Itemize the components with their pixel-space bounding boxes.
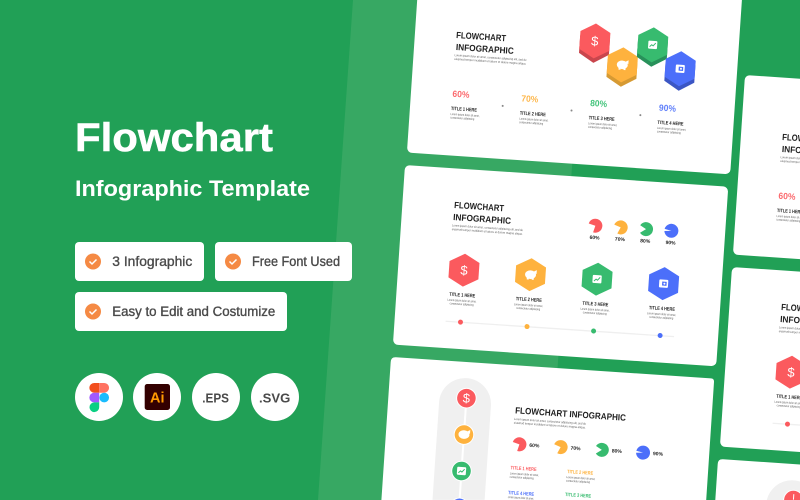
panel: slide 2 hexagon timeline [393,165,728,366]
step 3 [580,262,613,316]
subtitle: Infographic Template [75,176,310,201]
heading: INFOGRAPHIC [456,42,515,56]
pie: 80%: 80% [612,448,623,455]
item: title 4: TITLE 4 HERE [508,490,535,498]
heading: FLOWCHART [454,200,505,213]
step 2: consectetur adipiscing [516,306,541,311]
stat: 90% [657,103,688,135]
feature chip: 3 Infographic [75,242,204,281]
arrow markers [502,105,641,116]
icon: Figma [75,373,123,421]
icon: blue hexagon wallet [664,50,696,92]
icon: Adobe Illustrator [133,373,181,421]
vertical pill with icons [432,376,493,500]
pie: 90%: 90% [665,240,676,247]
heading [453,200,513,226]
pie: 70% [613,220,628,243]
stat: 90%: TITLE 4 HERE [657,120,684,128]
icon: red hexagon dollar: $ [591,33,600,49]
stat: 80%: Lorem ipsum dolor sit amet, [588,121,617,127]
heading [455,30,515,56]
pie: 90% [663,223,679,247]
icon: SVG badge [251,373,299,421]
stat: 60% [450,89,481,121]
panel: slide 1 hexagon flow [407,0,742,174]
item: title 2: consectetur adipiscing [566,479,590,484]
timeline [772,421,800,441]
stat: 70%: consectetur adipiscing [519,120,544,126]
stat: 80%: consectetur adipiscing [588,125,612,130]
step 3: consectetur adipiscing [583,310,607,316]
pie: 80% [639,222,653,245]
step 2 [513,257,547,312]
item: title 1: Lorem ipsum dolor sit amet, [510,471,539,477]
step 1: $ [460,262,469,278]
vertical pill with icon [767,479,800,500]
step 2: TITLE 2 HERE [516,296,542,304]
item: title 2 [566,469,596,484]
feature chip: Easy to Edit and Costumize [75,292,287,331]
description: eiusmod tempor incididunt ut labore et dolore magna aliqua. [514,421,586,430]
stat: 90%: consectetur adipiscing [657,129,681,135]
pie: 90% [636,445,664,461]
item: title 2: Lorem ipsum dolor sit amet, [566,475,596,481]
step 1: TITLE 1 HERE [449,292,476,300]
heading [780,302,800,328]
description: Lorem ipsum dolor sit amet, consectetur adipiscing elit, sed do [514,417,586,426]
icon: Adobe Illustrator: Ai [150,390,165,406]
pie: 60%: 60% [589,235,600,242]
stat: 80%: 80% [590,98,607,109]
step 3: TITLE 3 HERE [582,301,609,308]
item: title 2: TITLE 2 HERE [567,469,594,477]
panel: slide 3 vertical pill flow [381,357,714,500]
heading: FLOWCHART [456,30,507,43]
item: title 1: TITLE 1 HERE [510,465,537,473]
feature chip: Easy to Edit and Costumize: Easy to Edit and Costumize [112,304,275,319]
description [454,53,527,66]
heading [781,132,800,158]
pie: 90%: 90% [653,451,664,458]
pie: 80% [595,442,623,458]
step 1: Lorem ipsum dolor sit amet, [447,298,477,304]
description: eiusmod tempor incididunt ut labore et dolore magna aliqua. [454,57,526,66]
stat: 80% [588,98,619,131]
icon: yellow hexagon piggy [606,46,638,88]
description: Lorem ipsum dolor sit amet, consectetur adipiscing elit, sed do [454,53,527,62]
icon: green hexagon chart [636,26,669,68]
stat: 60%: Lorem ipsum dolor sit amet, [450,112,480,118]
heading: FLOWCHART INFOGRAPHIC [515,405,627,423]
description: eiusmod tempor incididunt ut labore et dolore magna aliqua. [452,227,523,236]
pie: 60%: 60% [529,443,540,449]
stat: 70%: TITLE 2 HERE [520,111,546,118]
description [452,223,523,236]
pie: 80%: 80% [640,238,651,245]
stat: 70%: 70% [521,93,539,104]
step 2: Lorem ipsum dolor sit amet, [514,302,543,308]
panel: right slide C (cropped) [715,459,800,500]
stat: 90%: Lorem ipsum dolor sit amet, [657,126,686,132]
feature chip: 3 Infographic: 3 Infographic [112,254,193,269]
description: Lorem ipsum dolor sit amet, consectetur adipiscing elit, sed do [452,223,523,232]
stat: 70%: Lorem ipsum dolor sit amet, [519,117,549,123]
step 1: $ [787,364,796,380]
step 1 [447,253,480,307]
timeline [445,319,674,339]
vertical pill with icons: $ [462,390,471,406]
panel: right slide B (cropped) [720,267,800,468]
item: title 3: TITLE 3 HERE [565,492,592,500]
pie: 60% [512,437,540,453]
main title: Flowchart [75,116,273,160]
icon: EPS badge [192,373,240,421]
icon: EPS badge: .EPS [202,390,229,405]
description [514,417,586,430]
feature chip: Free Font Used [215,242,352,281]
step 3: Lorem ipsum dolor sit amet, [580,307,610,313]
step 1 [774,355,800,409]
stat: 80%: TITLE 3 HERE [588,115,615,123]
step 4: consectetur adipiscing [649,315,674,320]
stat: 60% [776,191,800,223]
icon: SVG badge: .SVG [259,390,290,405]
pie: 70%: 70% [615,237,626,243]
panel: right slide A (cropped) [733,75,800,276]
item: title 4 [508,490,535,500]
item: title 1: consectetur adipiscing [510,475,534,480]
stat: 70% [519,93,550,126]
pie: 70% [554,440,582,455]
feature chip: Free Font Used: Free Font Used [252,254,340,269]
step 1: consectetur adipiscing [450,301,474,307]
step 4 [646,266,680,321]
item: title 1 [510,465,540,481]
pie: 60% [588,218,603,242]
stat: 60%: 60% [452,89,470,100]
step 4: Lorem ipsum dolor sit amet, [647,311,676,317]
stat: 90%: 90% [659,103,676,114]
heading: INFOGRAPHIC [453,212,512,226]
stat: 60%: 60% [778,191,796,202]
stat: 60%: consectetur adipiscing [450,115,475,121]
pie: 70%: 70% [570,446,581,452]
icon: red hexagon dollar [578,22,611,64]
stat: 60%: TITLE 1 HERE [451,106,478,114]
step 4: TITLE 4 HERE [649,305,676,313]
